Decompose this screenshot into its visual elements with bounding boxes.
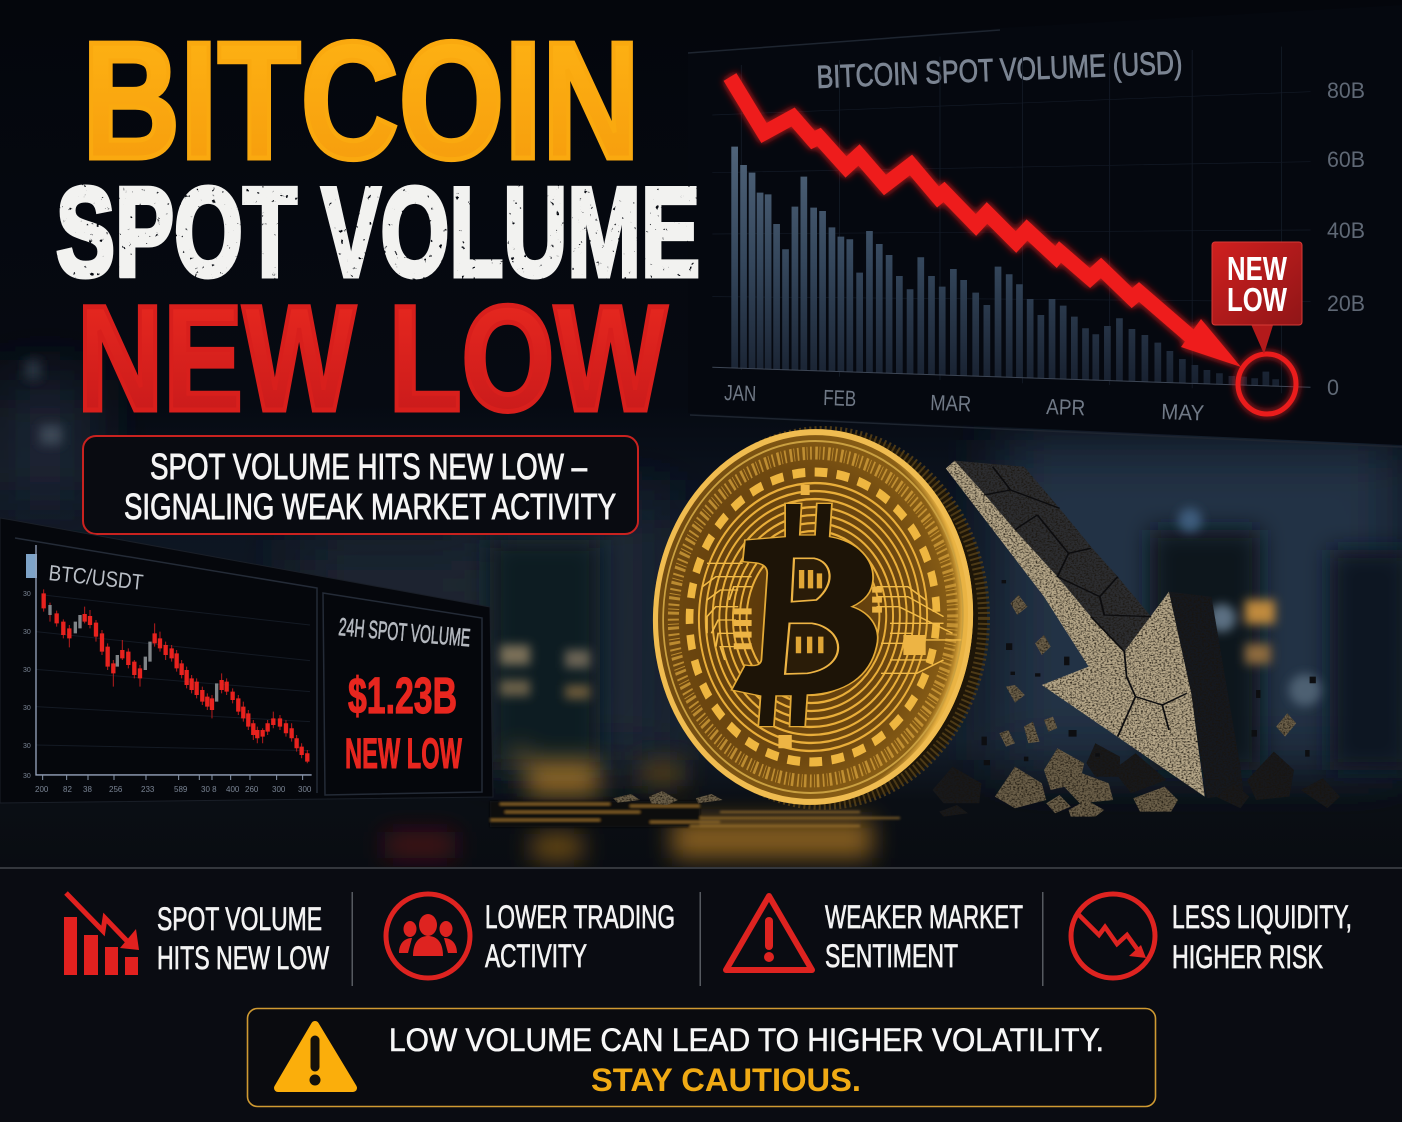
panel: Bitcoin spot volume chart <box>688 5 1402 447</box>
cracked stone arrow <box>946 461 1244 798</box>
24h volume readout: 24H SPOT VOLUME <box>337 613 471 652</box>
24h volume readout: NEW LOW <box>345 730 462 778</box>
24h volume readout: $1.23B <box>348 667 457 724</box>
feature: market sentiment: WEAKER MARKET <box>825 899 1023 935</box>
chart axis labels: 200 <box>35 785 49 794</box>
warning callout: LOW VOLUME CAN LEAD TO HIGHER VOLATILITY. <box>389 1022 1104 1058</box>
feature: liquidity risk: HIGHER RISK <box>1172 939 1323 975</box>
x axis labels <box>724 380 1205 426</box>
symbol marker <box>26 554 37 578</box>
feature: trading activity: LOWER TRADING <box>485 899 675 935</box>
warning callout: STAY CAUTIOUS. <box>591 1062 861 1098</box>
panel: BTC/USDT trading screen <box>0 518 493 803</box>
feature: liquidity risk <box>1071 894 1352 978</box>
circuit traces and bitcoin symbol <box>702 485 961 748</box>
x axis labels: MAY <box>1161 399 1205 426</box>
chart grid and bars <box>712 47 1310 393</box>
icon: prohibited falling line <box>1071 894 1155 978</box>
feature: spot volume: HITS NEW LOW <box>157 940 330 976</box>
y axis labels: 40B <box>1327 218 1365 243</box>
x axis labels: JAN <box>724 380 757 406</box>
gold floor reflections <box>385 748 872 860</box>
feature: spot volume <box>64 893 330 976</box>
coin face and rings <box>643 421 983 813</box>
pair label: BTC/USDT <box>47 560 145 595</box>
chart axis labels: 30 8 <box>201 785 217 794</box>
chart axis labels: 256 <box>109 785 123 794</box>
title: SPOT VOLUME: SPOT VOLUME <box>56 161 700 303</box>
subtitle callout <box>83 436 638 534</box>
chart axis labels: 38 <box>83 785 92 794</box>
title: NEW LOW: NEW LOW <box>77 274 667 442</box>
chart axis labels: 30 <box>23 591 31 598</box>
chart axis labels <box>23 591 312 794</box>
bitcoin coin <box>643 421 987 813</box>
chart axis labels: 233 <box>141 785 155 794</box>
chart axis labels: 30 <box>23 743 31 750</box>
new low badge <box>1212 242 1302 354</box>
icon: falling bars <box>64 893 139 975</box>
chart title: BITCOIN SPOT VOLUME (USD) <box>816 44 1183 95</box>
new low badge: NEW <box>1227 250 1288 287</box>
title: BITCOIN: BITCOIN <box>82 8 640 194</box>
bottom information band <box>0 867 1402 1122</box>
feature: market sentiment: SENTIMENT <box>825 938 958 974</box>
icon: warning triangle <box>726 896 812 970</box>
chart axis labels: 30 <box>23 629 31 636</box>
feature: spot volume: SPOT VOLUME <box>157 901 322 937</box>
chart axis labels: 300 <box>298 785 312 794</box>
y axis labels: 60B <box>1327 147 1365 172</box>
chart axis labels: 30 <box>23 705 31 712</box>
feature: trading activity <box>386 894 675 978</box>
new low target circle <box>1238 354 1296 414</box>
icon: people in circle <box>386 894 470 978</box>
subtitle callout: SIGNALING WEAK MARKET ACTIVITY <box>124 486 616 527</box>
subtitle callout: SPOT VOLUME HITS NEW LOW – <box>150 446 587 487</box>
red falling arrow <box>730 77 1241 367</box>
chart axis labels: 82 <box>63 785 72 794</box>
chart axis labels: 300 <box>272 785 286 794</box>
chart axis labels: 589 <box>174 785 188 794</box>
y axis labels <box>1327 78 1365 400</box>
new low badge: LOW <box>1227 281 1288 318</box>
24h volume readout <box>337 613 471 778</box>
chart axis labels: 400 <box>226 785 240 794</box>
chart axis labels: 30 <box>23 667 31 674</box>
feature: market sentiment <box>726 896 1023 974</box>
y axis labels: 80B <box>1327 78 1365 103</box>
x axis labels: FEB <box>823 385 857 411</box>
y axis labels: 0 <box>1327 375 1339 400</box>
y axis labels: 20B <box>1327 291 1365 316</box>
coin edge <box>662 430 987 806</box>
feature: trading activity: ACTIVITY <box>485 938 587 974</box>
candlestick chart <box>36 545 312 780</box>
chart axis labels: 30 <box>23 773 31 780</box>
chart axis labels: 260 <box>245 785 259 794</box>
rubble and debris <box>613 580 1340 817</box>
x axis labels: APR <box>1046 394 1086 420</box>
warning callout <box>248 1008 1156 1106</box>
x axis labels: MAR <box>930 390 972 416</box>
wet floor puddle <box>490 804 900 826</box>
icon: amber warning triangle <box>278 1025 353 1088</box>
